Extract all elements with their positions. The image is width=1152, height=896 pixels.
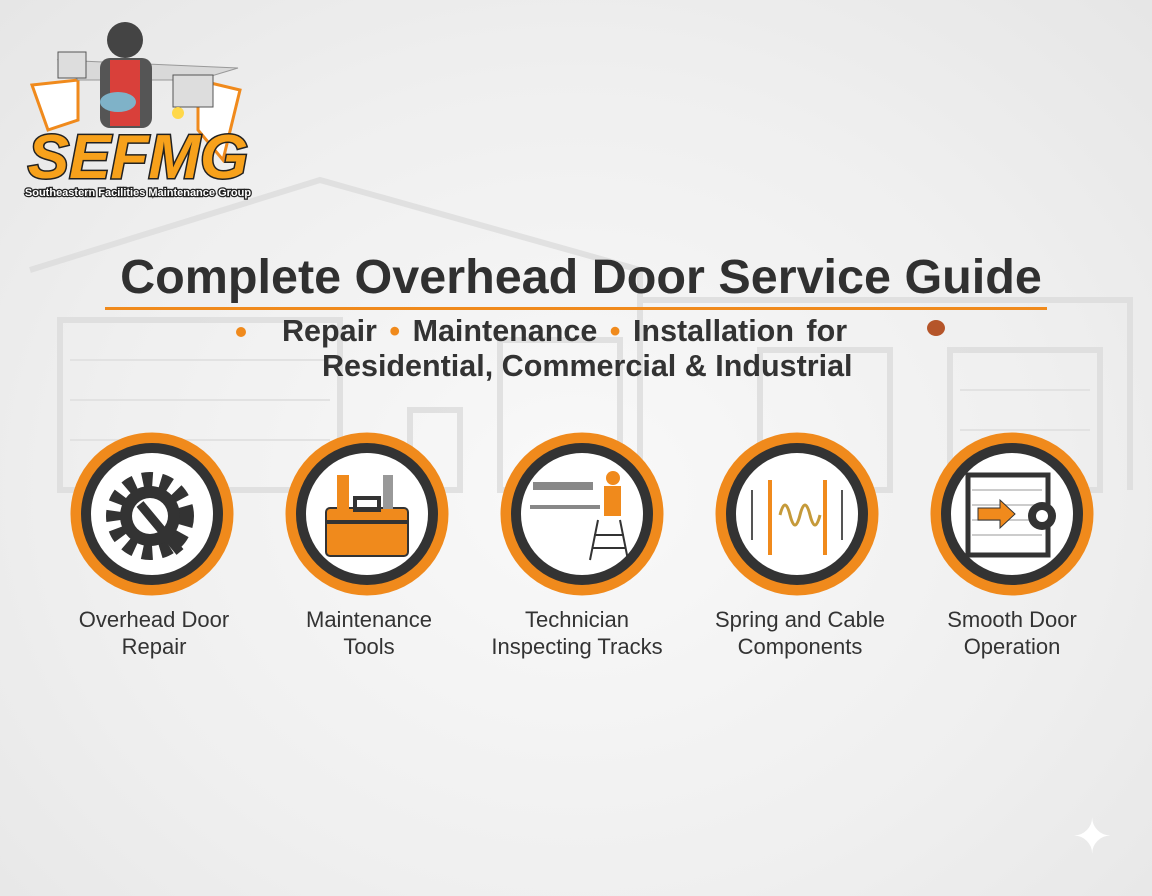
sparkle: ✦: [1072, 811, 1112, 864]
icon: springs: [752, 480, 842, 555]
text: Spring and Cable: [715, 607, 885, 632]
text: Inspecting Tracks: [491, 634, 663, 659]
icon: door operation: [968, 475, 1056, 555]
subtitle: Repair • Maintenance • Installation for: [282, 314, 847, 348]
icon: technician: [530, 471, 628, 560]
subtitle: Residential, Commercial & Industrial: [322, 349, 853, 383]
text: Components: [738, 634, 862, 659]
text: Tools: [343, 634, 395, 659]
text: Technician: [525, 607, 629, 632]
text: Operation: [964, 634, 1060, 659]
logo: SEFMG: [28, 123, 248, 192]
text: Maintenance: [306, 607, 432, 632]
labels: Repair: [122, 634, 186, 659]
text: Smooth Door: [947, 607, 1077, 632]
icon: toolbox: [326, 475, 408, 556]
title: Complete Overhead Door Service Guide: [120, 250, 1042, 304]
icon circles: [70, 432, 1094, 596]
icon: gear wrench: [114, 480, 186, 552]
logo: [24, 22, 252, 200]
subtitle: [236, 314, 945, 383]
logo: Southeastern Facilities Maintenance Group: [25, 187, 251, 199]
labels: Overhead Door: [79, 607, 229, 632]
labels: [79, 607, 229, 659]
